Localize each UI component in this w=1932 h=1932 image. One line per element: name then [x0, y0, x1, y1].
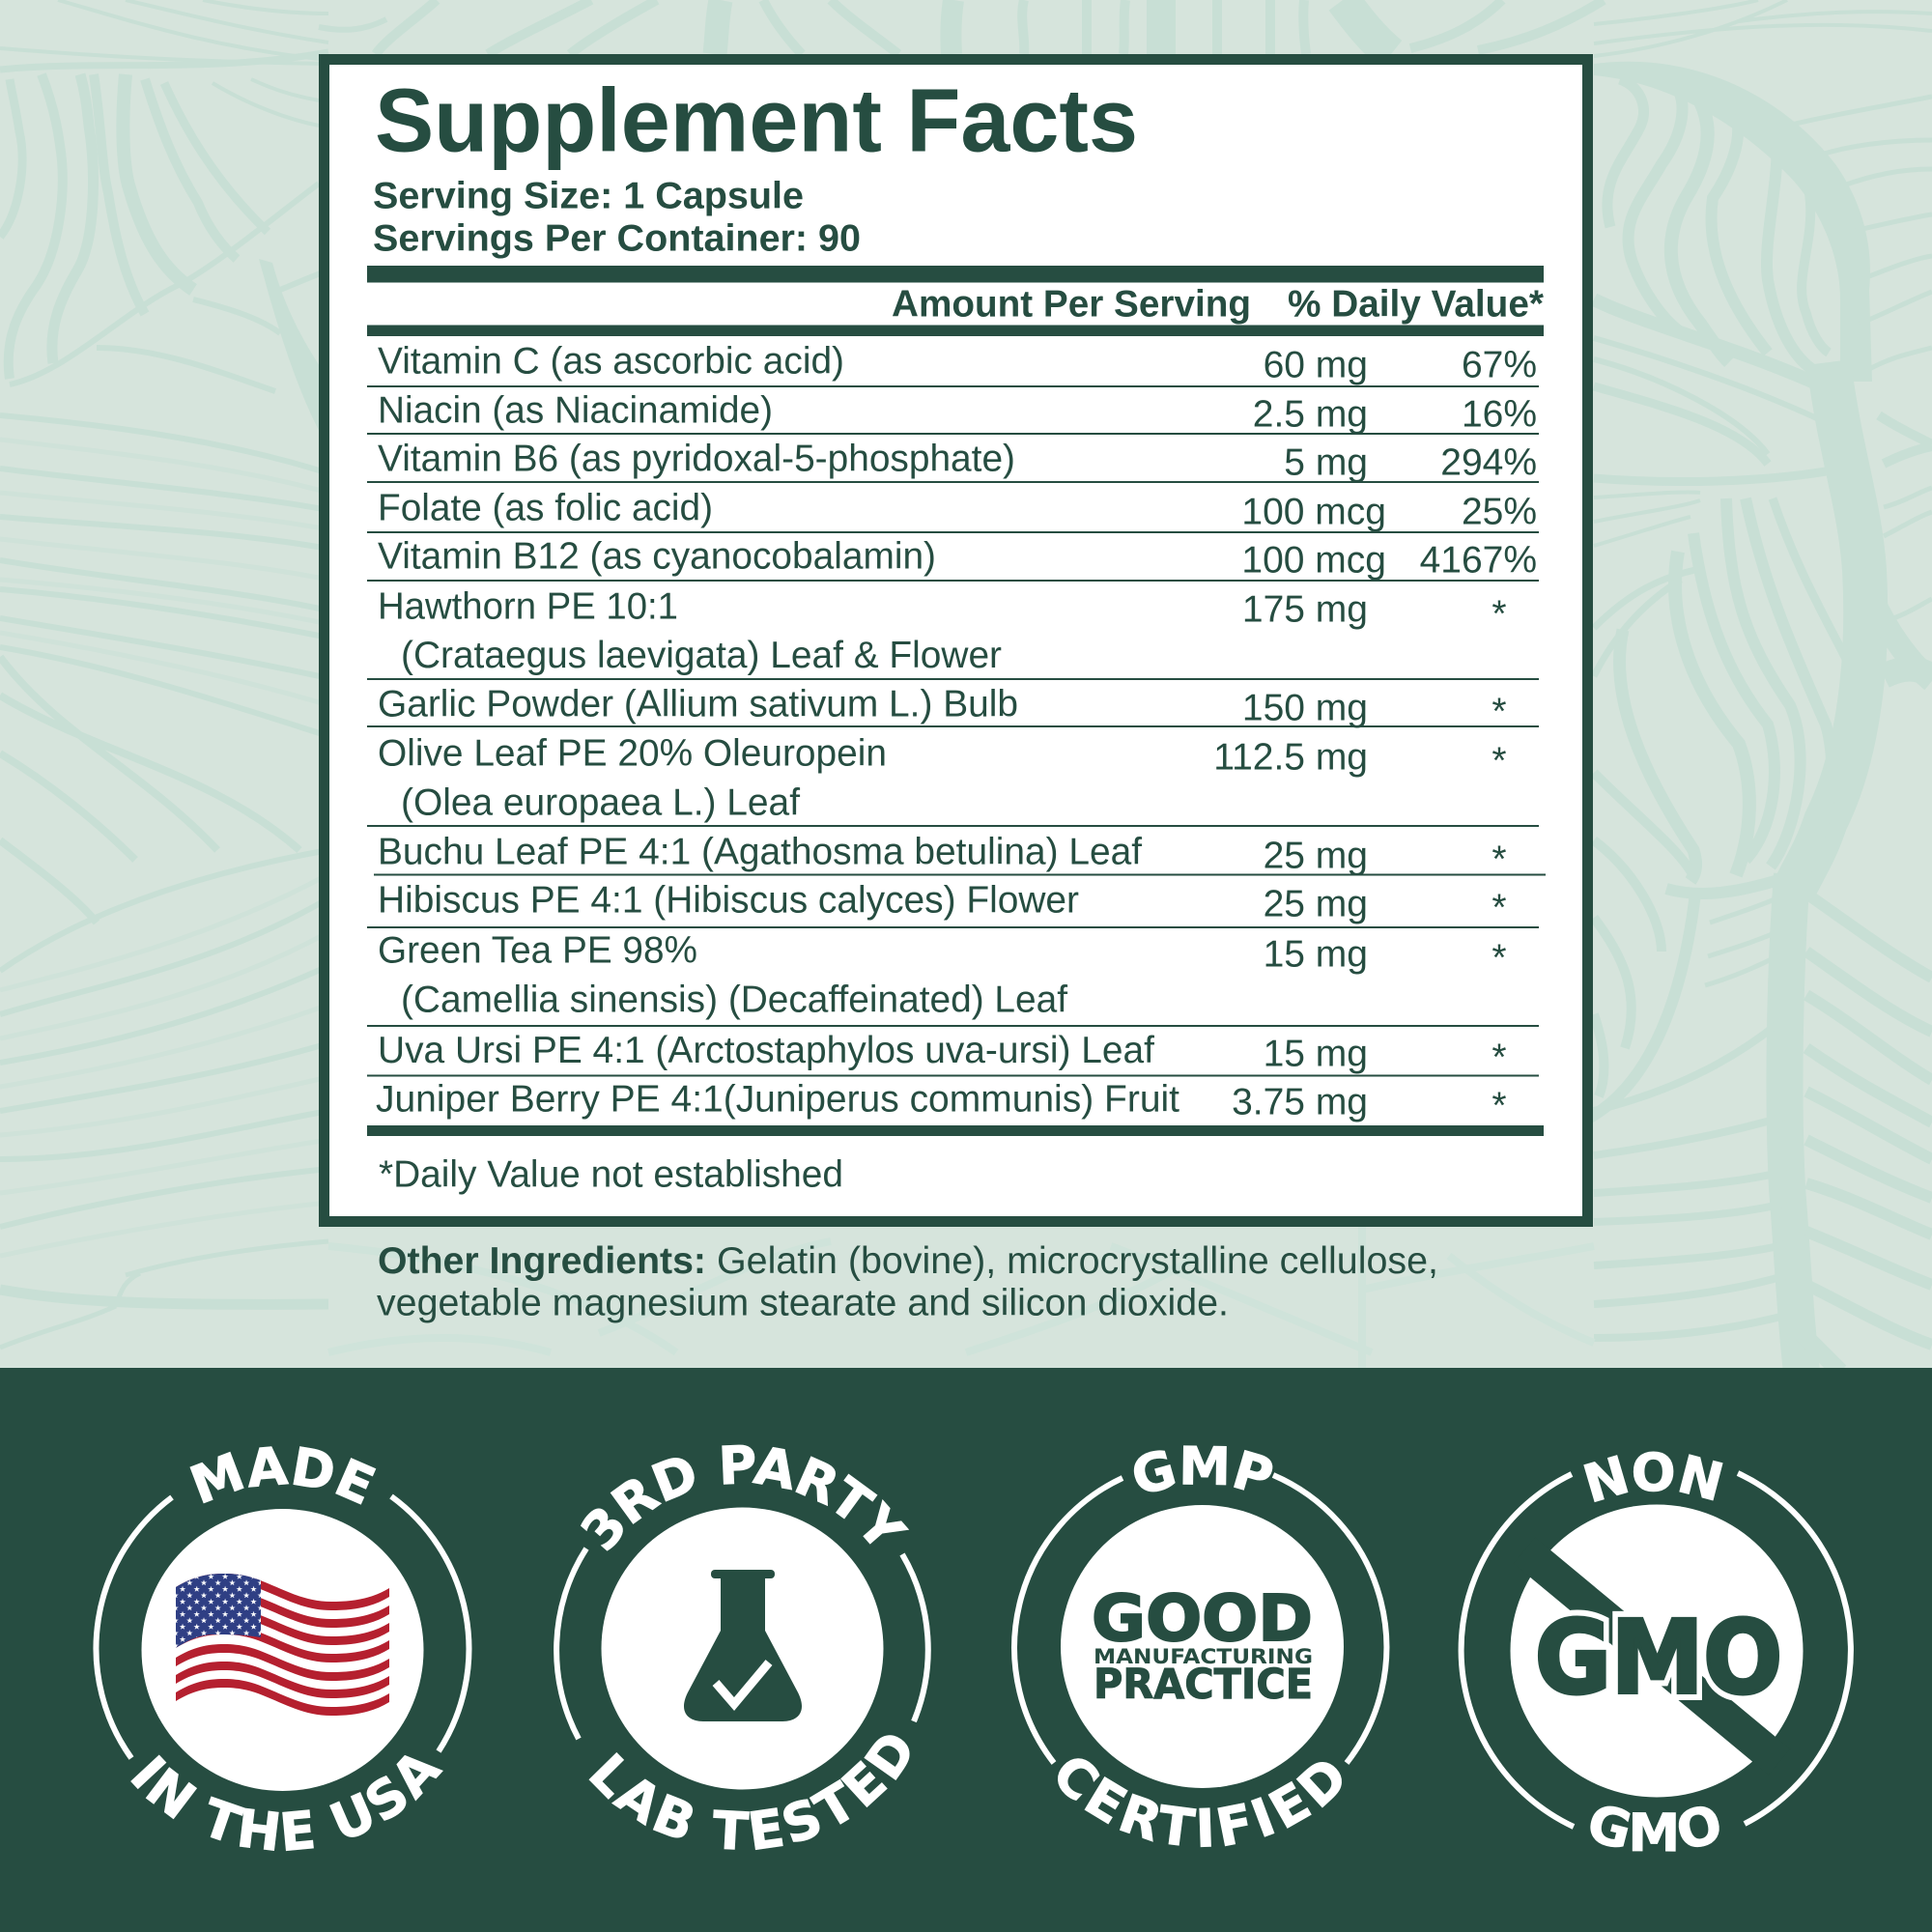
badge: non gmo: NON	[1583, 1451, 1723, 1503]
title: Supplement Facts	[375, 71, 1138, 171]
nutrient rows: 175 mg	[1242, 589, 1368, 631]
nutrient rows: 25%	[1462, 492, 1537, 533]
good manufacturing practice text: MANUFACTURING	[1094, 1645, 1313, 1668]
prohibition slash	[1524, 1550, 1779, 1762]
good manufacturing practice text: GOOD	[1092, 1581, 1313, 1656]
other ingredients: Other Ingredients:	[378, 1240, 706, 1282]
badge: gmp certified: CERTIFIED	[1058, 1758, 1342, 1847]
nutrient rows: (Olea europaea L.) Leaf	[401, 782, 800, 824]
badge: 3rd party lab tested: LAB TESTED	[589, 1735, 910, 1851]
footer band	[0, 1368, 1932, 1932]
nutrient rows: *	[1492, 692, 1507, 733]
table header	[367, 266, 1545, 336]
good manufacturing practice text	[1092, 1581, 1313, 1709]
nutrient rows: Vitamin B6 (as pyridoxal-5-phosphate)	[378, 439, 1015, 480]
nutrient rows: 15 mg	[1264, 934, 1368, 976]
nutrient rows: 3.75 mg	[1232, 1082, 1368, 1123]
nutrient rows: Vitamin B12 (as cyanocobalamin)	[378, 536, 936, 578]
serving information: Servings Per Container: 90	[373, 218, 861, 260]
other ingredients: vegetable magnesium stearate and silicon dioxide.	[377, 1283, 1229, 1324]
nutrient rows: 2.5 mg	[1253, 394, 1368, 436]
nutrient rows: Garlic Powder (Allium sativum L.) Bulb	[378, 684, 1018, 725]
badge: gmp certified: GMP	[1134, 1445, 1273, 1492]
nutrient rows: *	[1492, 888, 1507, 929]
supplement facts panel	[325, 60, 1588, 1221]
other ingredients: Gelatin (bovine), microcrystalline cellulose,	[717, 1240, 1438, 1282]
gmo text: GMO	[1535, 1599, 1782, 1717]
nutrient rows: 112.5 mg	[1213, 737, 1368, 779]
nutrient rows: *	[1492, 1037, 1507, 1079]
nutrient rows: Folate (as folic acid)	[378, 488, 713, 529]
badge: 3rd party lab tested	[554, 1445, 931, 1851]
nutrient rows: 100 mcg	[1241, 540, 1386, 582]
nutrient rows: (Crataegus laevigata) Leaf & Flower	[401, 635, 1002, 676]
nutrient rows: 67%	[1462, 345, 1537, 386]
footnote: *Daily Value not established	[379, 1154, 843, 1196]
nutrient rows: Niacin (as Niacinamide)	[378, 390, 773, 432]
nutrient rows: 100 mcg	[1241, 492, 1386, 533]
nutrient rows: (Camellia sinensis) (Decaffeinated) Leaf	[401, 980, 1067, 1021]
icon: american flag	[176, 1574, 389, 1716]
nutrient rows: 294%	[1440, 442, 1537, 484]
badge: made in the usa	[93, 1446, 471, 1851]
nutrient rows: 25 mg	[1264, 836, 1368, 877]
badge: 3rd party lab tested: 3RD PARTY	[581, 1445, 910, 1551]
badge: non gmo	[1459, 1451, 1854, 1852]
nutrient rows: Green Tea PE 98%	[378, 930, 697, 972]
nutrient rows: 5 mg	[1284, 442, 1368, 484]
gmo text: GMO	[1535, 1599, 1782, 1717]
nutrient rows: 16%	[1462, 394, 1537, 436]
badge: gmp certified	[1010, 1445, 1389, 1847]
nutrient rows: Hawthorn PE 10:1	[378, 586, 678, 628]
badge: made in the usa: IN THE USA	[130, 1754, 443, 1851]
nutrient rows: 15 mg	[1264, 1034, 1368, 1075]
nutrient rows: Olive Leaf PE 20% Oleuropein	[378, 733, 887, 775]
nutrient rows: *	[1492, 741, 1507, 782]
nutrient rows: Vitamin C (as ascorbic acid)	[378, 341, 844, 383]
table header: Amount Per Serving	[892, 284, 1251, 326]
badge: non gmo: GMO	[1590, 1806, 1719, 1852]
good manufacturing practice text: PRACTICE	[1094, 1661, 1313, 1709]
nutrient rows: *	[1492, 839, 1507, 881]
nutrient rows: 4167%	[1420, 540, 1537, 582]
nutrient rows: Hibiscus PE 4:1 (Hibiscus calyces) Flower	[378, 880, 1079, 922]
nutrient rows	[367, 341, 1546, 1136]
nutrient rows: Uva Ursi PE 4:1 (Arctostaphylos uva-ursi) Leaf	[378, 1030, 1154, 1071]
other ingredients	[377, 1240, 1438, 1324]
nutrient rows: *	[1492, 594, 1507, 636]
table header: % Daily Value*	[1288, 284, 1545, 326]
nutrient rows: 25 mg	[1264, 884, 1368, 925]
nutrient rows: Buchu Leaf PE 4:1 (Agathosma betulina) Leaf	[378, 832, 1142, 873]
background leaf pattern	[0, 0, 1932, 1372]
badge: made in the usa: MADE	[189, 1446, 377, 1505]
nutrient rows: Juniper Berry PE 4:1(Juniperus communis) Fruit	[376, 1079, 1179, 1121]
nutrient rows: 150 mg	[1242, 688, 1368, 729]
icon: flask with check	[684, 1570, 802, 1721]
nutrient rows: *	[1492, 1086, 1507, 1127]
serving information: Serving Size: 1 Capsule	[373, 176, 804, 217]
nutrient rows: *	[1492, 938, 1507, 980]
nutrient rows: 60 mg	[1264, 345, 1368, 386]
serving information	[373, 176, 861, 260]
